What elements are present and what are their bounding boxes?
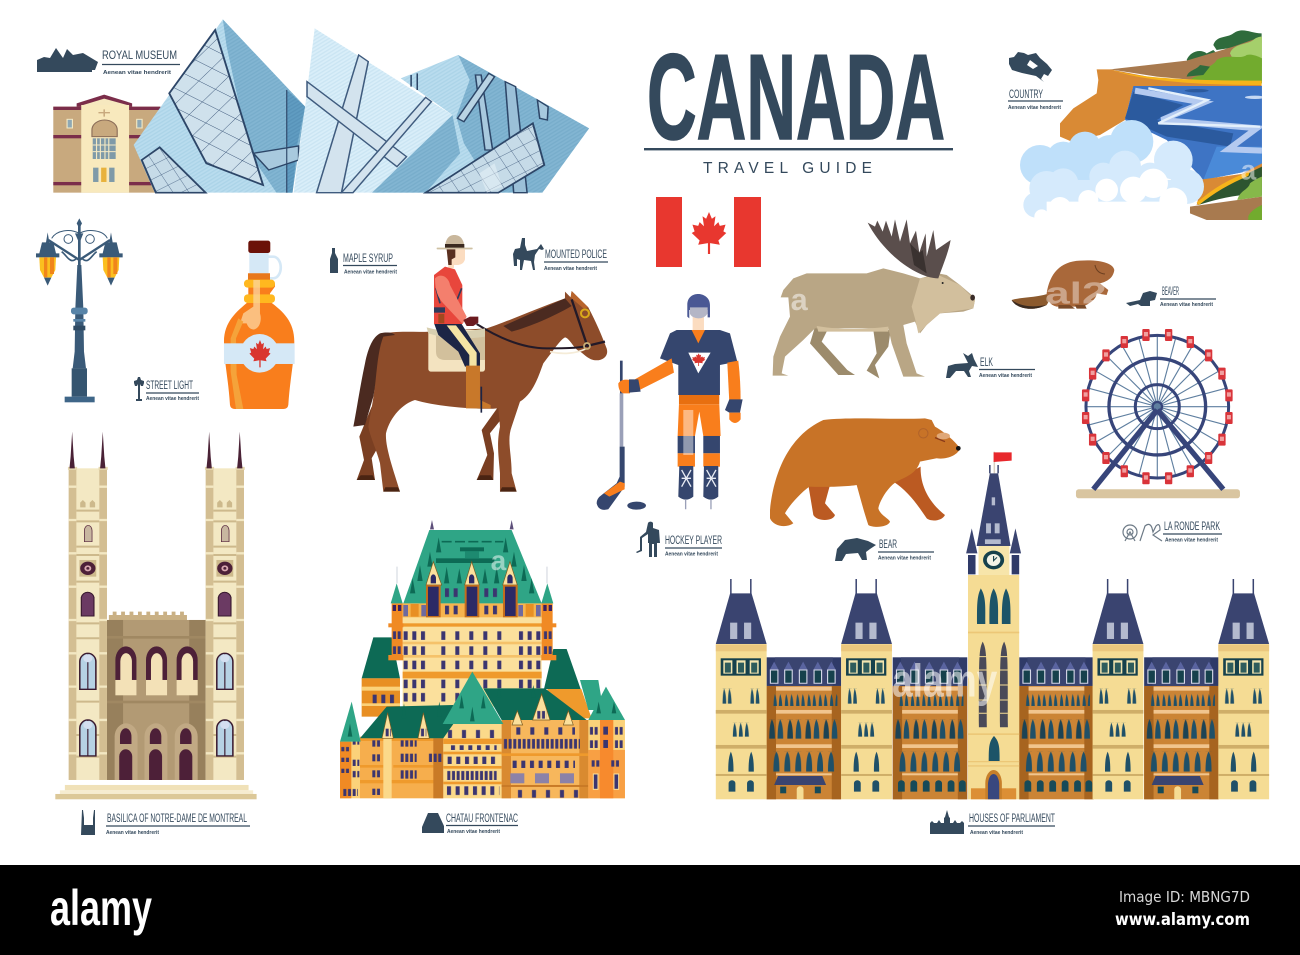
label: street light	[134, 377, 199, 402]
spokes	[1085, 334, 1230, 479]
label: bear: Aenean vitae hendrerit	[878, 556, 931, 562]
label: hockey player	[636, 522, 722, 558]
icon: horse and rider	[513, 238, 544, 270]
heading: canada: CANADA	[647, 29, 945, 165]
image id: Image ID: MBNG7D	[1119, 888, 1250, 906]
label: maple syrup: MAPLE SYRUP	[343, 253, 393, 265]
lower roofs	[340, 672, 625, 742]
top greenery	[1110, 30, 1262, 83]
website: www.alamy.com	[1115, 910, 1250, 930]
label: country	[1008, 52, 1063, 111]
icon: syrup bottle	[330, 248, 338, 273]
main wall	[403, 603, 542, 707]
far legs	[808, 467, 945, 520]
label: la ronde park	[1123, 521, 1222, 544]
lower walls	[340, 720, 625, 798]
body	[773, 268, 975, 377]
watermark letter: a	[791, 283, 809, 317]
label: la ronde park: Aenean vitae hendrerit	[1165, 538, 1218, 544]
title	[644, 29, 953, 177]
subheading: travel guide: TRAVEL GUIDE	[703, 160, 872, 177]
cliff	[1060, 69, 1262, 142]
skates	[678, 466, 718, 509]
label: elk: ELK	[980, 357, 993, 369]
icon: beaver	[1126, 291, 1157, 306]
label: elk: Aenean vitae hendrerit	[979, 373, 1032, 379]
icon: museum silhouette	[37, 48, 98, 72]
label: street light: STREET LIGHT	[146, 380, 193, 392]
label: bear	[835, 538, 934, 562]
arms and gloves	[618, 358, 743, 423]
icon: basilica	[81, 810, 95, 835]
rider	[434, 235, 491, 413]
icon: bear	[835, 538, 876, 561]
label: hockey player: HOCKEY PLAYER	[665, 535, 722, 547]
label: chateau frontenac	[422, 813, 518, 835]
label: mounted police: Aenean vitae hendrerit	[544, 266, 597, 272]
crystal right	[372, 55, 589, 193]
illustration: bear	[770, 418, 961, 527]
watermark: al2	[1045, 276, 1107, 310]
label: country: Aenean vitae hendrerit	[1008, 105, 1061, 111]
label: maple syrup: Aenean vitae hendrerit	[344, 270, 397, 276]
label: mounted police: MOUNTED POLICE	[545, 249, 607, 261]
label: chateau frontenac: Aenean vitae hendrerit	[447, 829, 500, 835]
label: mounted police	[513, 238, 608, 272]
illustration: basilica of notre-dame	[55, 432, 257, 799]
icon: street lamp	[134, 377, 144, 401]
illustration: ferris wheel	[1076, 329, 1240, 498]
label: houses of parliament: Aenean vitae hendrerit	[970, 830, 1023, 836]
icon: wheel and coaster	[1123, 524, 1162, 541]
label: houses of parliament: HOUSES OF PARLIAMENT	[969, 813, 1055, 825]
lamp post	[48, 218, 110, 402]
central facade	[107, 612, 206, 780]
label: royal museum	[37, 48, 180, 76]
right tower	[205, 432, 245, 780]
horse far legs	[357, 407, 503, 480]
icon: parliament	[930, 810, 964, 834]
label: basilica	[81, 810, 250, 836]
central clock tower	[966, 452, 1021, 799]
lower shore	[1190, 163, 1262, 220]
illustration: mounted police on horse	[353, 235, 607, 492]
label: country: COUNTRY	[1009, 89, 1043, 101]
crystal middle	[294, 28, 452, 193]
label: chateau frontenac: CHATAU FRONTENAC	[446, 813, 518, 825]
icon: hockey player	[636, 522, 660, 557]
horse mane	[503, 298, 572, 332]
label band	[224, 334, 295, 373]
side towers	[716, 579, 1269, 799]
icon: map of canada	[1009, 52, 1052, 82]
cabins	[1082, 329, 1233, 484]
label: royal museum: ROYAL MUSEUM	[102, 50, 177, 62]
shorts and socks	[678, 395, 721, 467]
far legs	[810, 327, 891, 378]
upper roof	[403, 520, 542, 603]
footer bar	[0, 865, 1300, 955]
label: royal museum: Aenean vitae hendrerit	[103, 70, 171, 76]
wings	[767, 657, 1219, 799]
label: beaver: Aenean vitae hendrerit	[1160, 302, 1213, 308]
label: bear: BEAR	[879, 539, 897, 551]
left tower	[68, 432, 108, 780]
side wings	[362, 637, 603, 718]
label: houses of parliament	[930, 810, 1055, 836]
crystal left	[134, 19, 305, 193]
dormers	[403, 562, 541, 617]
support legs	[1093, 410, 1223, 489]
jersey	[660, 330, 737, 395]
illustration: chateau frontenac	[340, 520, 625, 798]
icon: elk	[946, 353, 978, 378]
illustration: beaver	[1012, 260, 1114, 310]
watermark: alamy	[892, 654, 998, 707]
label: basilica: BASILICA OF NOTRE-DAME DE MONTREAL	[107, 813, 247, 825]
illustration: hockey player	[597, 294, 743, 510]
right lantern	[99, 232, 123, 286]
watermark letter: a	[491, 545, 507, 576]
label: basilica: Aenean vitae hendrerit	[106, 830, 159, 836]
illustration: houses of parliament	[716, 452, 1269, 799]
mist clouds	[1020, 120, 1204, 227]
corner turrets	[388, 567, 556, 660]
icon: chateau	[422, 813, 444, 833]
illustration: niagara falls	[1020, 30, 1265, 227]
horse body	[368, 291, 607, 492]
bear body	[770, 418, 960, 527]
historic museum building	[53, 95, 160, 193]
antlers	[868, 219, 951, 278]
rings	[1086, 335, 1229, 478]
label: elk	[946, 353, 1035, 379]
illustration: elk	[773, 219, 975, 378]
stick and puck	[597, 361, 646, 510]
label: street light: Aenean vitae hendrerit	[146, 396, 199, 402]
horse tack	[477, 299, 605, 353]
left lantern	[36, 232, 59, 286]
water	[1125, 86, 1265, 180]
illustration: royal museum	[53, 19, 589, 193]
helmet and face	[687, 294, 710, 331]
illustration: maple syrup bottle	[224, 241, 295, 409]
label: beaver: BEAVER	[1162, 286, 1179, 298]
label: maple syrup	[330, 248, 397, 276]
icon: canadian flag	[656, 197, 761, 267]
horse tail	[353, 332, 395, 427]
label: hockey player: Aenean vitae hendrerit	[665, 552, 718, 558]
steps	[55, 785, 257, 799]
saddle	[428, 330, 485, 372]
footer logo: alamy	[50, 880, 152, 936]
label: la ronde park: LA RONDE PARK	[1164, 521, 1220, 533]
label: beaver	[1126, 286, 1216, 308]
illustration: street light	[36, 218, 123, 402]
watermark letter: a	[1241, 154, 1257, 185]
